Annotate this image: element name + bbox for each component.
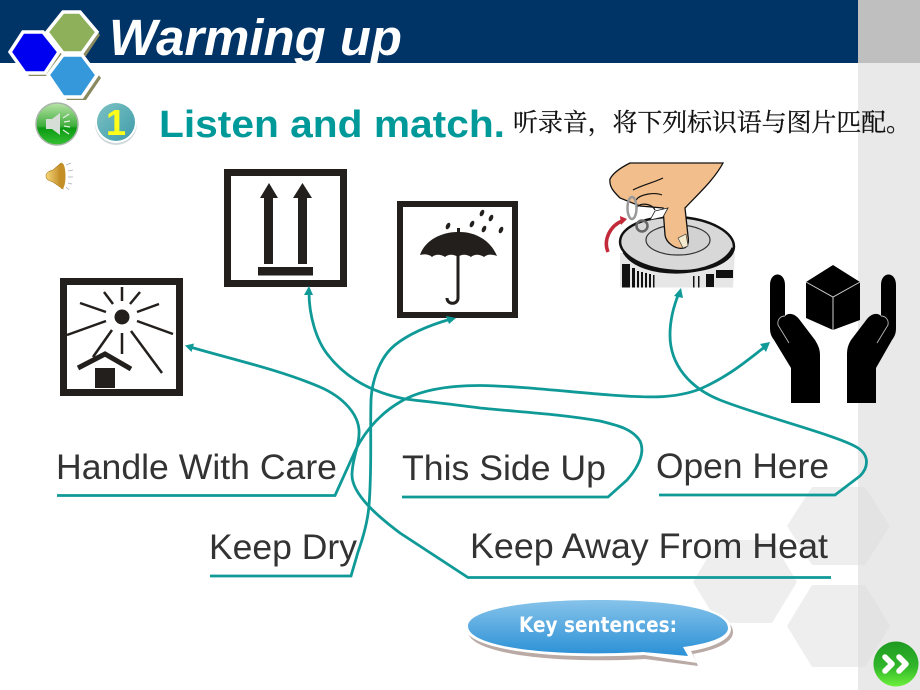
matching line: this side up (304, 286, 642, 497)
callout: key sentences (465, 598, 733, 666)
label: keep dry: Keep Dry (209, 528, 357, 567)
icon: hexagon logo (10, 12, 101, 100)
title: Warming up (109, 9, 402, 66)
label: open here: Open Here (656, 447, 829, 486)
icon: handle with care hands (770, 265, 896, 403)
icon: green speaker button (36, 103, 78, 145)
matching line: handle with care (57, 342, 770, 496)
matching line: keep dry (210, 316, 456, 576)
label: this side up: This Side Up (402, 449, 606, 488)
heading: listen and match: Listen and match. (159, 104, 505, 146)
matching line: keep away from heat (185, 344, 831, 578)
label: keep away from heat: Keep Away From Heat (470, 527, 828, 566)
callout: key sentences: Key sentences: (519, 613, 677, 637)
icon: keep dry umbrella (400, 204, 515, 315)
label: handle with care: Handle With Care (56, 448, 337, 487)
icon: keep away from heat (64, 282, 180, 392)
icon: this side up (228, 172, 344, 284)
icon: small audio speaker (46, 163, 73, 190)
icon: number badge: 1 (106, 102, 126, 143)
matching line: open here (659, 288, 866, 495)
icon: next button (874, 642, 918, 686)
icon: open here can (606, 163, 735, 288)
icon: number badge (95, 101, 137, 145)
instruction text: 听录音，将下列标识语与图片匹配。 (513, 103, 911, 139)
header bar (0, 0, 920, 63)
